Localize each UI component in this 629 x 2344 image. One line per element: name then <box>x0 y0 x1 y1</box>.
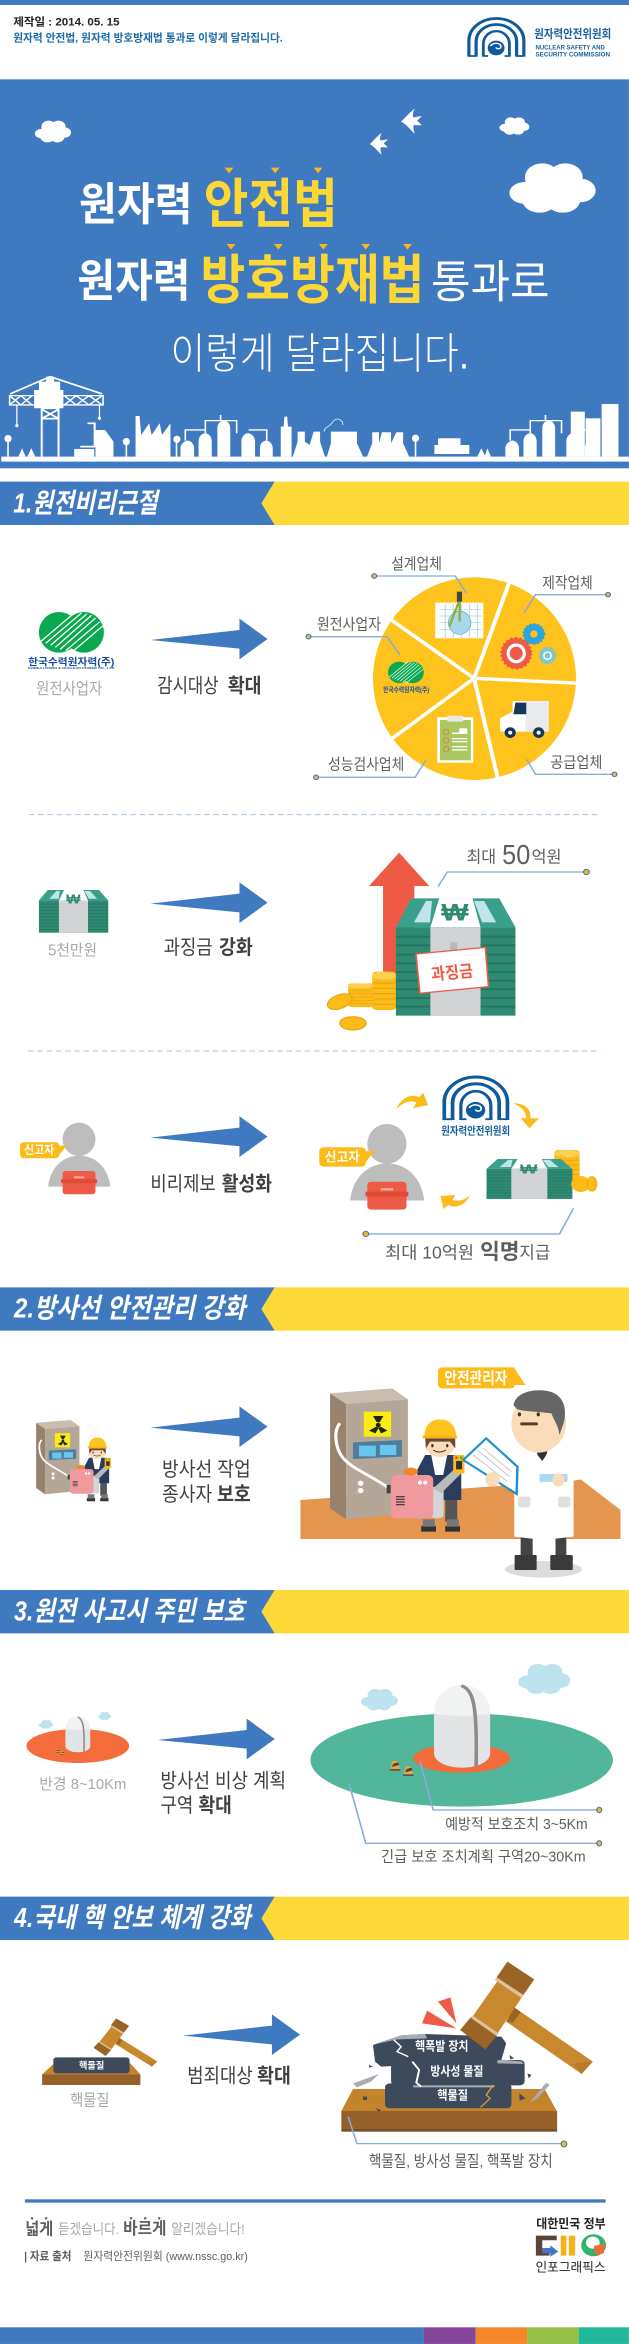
title line 2: 원자력 <box>77 256 191 307</box>
icon: big gavel smashing blocks <box>341 1962 593 2132</box>
callout: anonymous reward: 최대 10억원 <box>385 1243 474 1263</box>
title line 2: 통과로 <box>431 257 550 308</box>
section 1 header bar <box>0 482 629 525</box>
text: wider crime scope: 확대 <box>257 2065 291 2087</box>
text: emergency plan: 구역 <box>160 1794 193 1816</box>
icon: red up arrow <box>369 853 429 977</box>
section 2 header bar <box>0 1287 629 1331</box>
logo: government infographics: 인포그래픽스 <box>535 2260 606 2274</box>
callouts: pie labels: 설계업체 <box>391 555 442 573</box>
icon: clipboard <box>437 716 473 763</box>
callout: anonymous reward: 익명 <box>480 1240 519 1264</box>
panel: penalties and whistleblowing <box>20 815 600 1264</box>
icon: money and coins: ₩ <box>520 1162 538 1177</box>
icon: big money stack with tag <box>396 898 515 1016</box>
logo: KHNP before: KOREA HYDRO & NUCLEAR POWER CO., LTD <box>28 666 115 670</box>
arrow <box>183 2014 300 2055</box>
callout: max 5 billion won: 억원 <box>531 847 562 866</box>
arrow <box>150 619 268 659</box>
arrow <box>150 1406 268 1447</box>
icon: big whistleblower <box>319 1124 424 1210</box>
arrow <box>150 1116 268 1157</box>
footer source <box>24 2250 248 2263</box>
label: 50 million won: 5천만원 <box>48 942 97 959</box>
section 4 header bar: 4.국내 핵 안보 체계 강화 <box>13 1903 253 1933</box>
text: worker protection: 보호 <box>217 1483 251 1505</box>
footer slogan: 넓게 <box>25 2219 53 2238</box>
logo: government infographics <box>535 2216 606 2274</box>
small zone map <box>26 1712 129 1763</box>
pie chart <box>373 577 580 780</box>
icon: big gavel smashing blocks: 방사성 물질 <box>430 2064 483 2078</box>
title line 1: 안전법 <box>204 174 338 234</box>
callouts: zone sizes: 예방적 보호조치 3~5Km <box>445 1816 588 1833</box>
text: emergency plan: 방사선 비상 계획 <box>160 1769 286 1792</box>
small KHNP logo in pie: 한국수력원자력(주) <box>383 686 430 694</box>
logo: commission <box>441 1077 510 1137</box>
callouts: pie labels: 원전사업자 <box>317 616 381 633</box>
hero banner <box>0 79 629 468</box>
title line 1 <box>79 168 338 234</box>
callout: max 5 billion won: 50 <box>502 840 530 870</box>
text: whistleblowing: 비리제보 <box>150 1173 216 1195</box>
callout: anonymous reward: 지급 <box>519 1243 550 1263</box>
icon: big gavel smashing blocks: 핵물질 <box>437 2088 468 2102</box>
icon: truck <box>500 701 549 738</box>
icon: small gavel and block: 핵물질 <box>79 2059 104 2071</box>
callouts: pie labels: 공급업체 <box>550 754 602 771</box>
title line 2: 방호방재법 <box>201 251 424 310</box>
text: emergency plan <box>160 1769 286 1816</box>
logo: nuclear safety commission: NUCLEAR SAFETY AND <box>535 43 605 51</box>
page header <box>0 0 629 58</box>
section 3 header bar <box>0 1590 629 1633</box>
clouds <box>35 117 596 213</box>
icon: big money stack with tag: ₩ <box>441 899 470 926</box>
footer slogan: 듣겠습니다. <box>58 2221 119 2238</box>
icon: big cabinet and worker <box>330 1388 464 1532</box>
logo: KHNP before: 한국수력원자력(주) <box>28 655 115 668</box>
footer source: | 자료 출처 <box>24 2250 71 2263</box>
callout: anonymous reward <box>363 1208 574 1264</box>
subtitle line: 원자력 안전법, 원자력 방호방재법 통과로 이렇게 달라집니다. <box>13 31 283 44</box>
icon: safety manager <box>463 1390 582 1578</box>
icon: cycle arrows <box>396 1093 539 1209</box>
logo: nuclear safety commission: SECURITY COMMISSION <box>535 50 610 58</box>
section 2 header bar: 2.방사선 안전관리 강화 <box>13 1294 248 1324</box>
panel: nuclear security <box>24 1962 606 2274</box>
production date: 제작일 : 2014. 05. 15 <box>13 14 120 28</box>
large zone map <box>310 1664 613 1807</box>
text: emergency plan: 확대 <box>199 1794 232 1816</box>
title line 1: 원자력 <box>79 179 193 230</box>
panel: radiation safety <box>36 1367 621 1578</box>
logo: commission: 원자력안전위원회 <box>441 1125 510 1137</box>
callout: covered materials <box>348 2117 567 2170</box>
footer slogan: 알리겠습니다! <box>171 2221 245 2238</box>
logo: nuclear safety commission <box>469 19 611 58</box>
callout: max 5 billion won <box>438 840 589 887</box>
icon: small whistleblower: 신고자 <box>24 1143 54 1157</box>
callouts: zone sizes: 긴급 보호 조치계획 구역20~30Km <box>381 1849 586 1865</box>
icon: small money stack <box>39 890 108 933</box>
tag: safety manager: 안전관리자 <box>444 1369 507 1387</box>
arrow <box>150 882 268 923</box>
label: nuclear material: 핵물질 <box>70 2091 110 2109</box>
small KHNP logo in pie <box>383 662 430 694</box>
icon: small money stack: ₩ <box>66 892 81 906</box>
arrow <box>158 1719 275 1759</box>
icon: blueprint <box>435 592 483 638</box>
text: wider inspection: 확대 <box>228 675 262 697</box>
text: whistleblowing: 활성화 <box>222 1173 272 1195</box>
icon: small gavel and block <box>42 2018 157 2085</box>
icon: big whistleblower: 신고자 <box>325 1150 360 1165</box>
icon: small cabinet and worker <box>36 1420 111 1501</box>
icon: big gavel smashing blocks: 핵폭발 장치 <box>415 2039 468 2053</box>
label: operator: 원전사업자 <box>36 680 102 698</box>
city skyline <box>1 377 629 462</box>
title line 2 <box>77 244 550 310</box>
title line 3: 이렇게 달라집니다. <box>170 330 469 378</box>
text: worker protection: 종사자 <box>162 1483 212 1505</box>
text: wider crime scope: 범죄대상 <box>187 2065 253 2087</box>
section 3 header bar: 3.원전 사고시 주민 보호 <box>14 1597 247 1627</box>
panel: inspection scope <box>28 555 617 780</box>
footer colour bar <box>0 2327 629 2344</box>
icon: gears <box>501 624 556 669</box>
callouts: pie labels <box>306 555 617 780</box>
logo: government infographics: 대한민국 정부 <box>536 2216 606 2231</box>
text: stronger penalty: 과징금 <box>164 936 213 959</box>
icon: coins <box>324 972 396 1030</box>
text: wider inspection: 감시대상 <box>157 675 219 697</box>
text: worker protection: 방사선 작업 <box>162 1458 251 1480</box>
callouts: zone sizes <box>349 1761 602 1865</box>
callout: covered materials: 핵물질, 방사성 물질, 핵폭발 장치 <box>369 2152 553 2170</box>
birds <box>370 108 422 155</box>
text: worker protection <box>162 1458 251 1505</box>
logo: KHNP before <box>28 612 115 670</box>
section 4 header bar <box>0 1897 629 1940</box>
ground <box>300 1479 621 1539</box>
callout: max 5 billion won: 최대 <box>466 847 496 866</box>
section 1 header bar: 1.원전비리근절 <box>13 489 160 519</box>
callouts: pie labels: 성능검사업체 <box>328 756 404 773</box>
footer slogan <box>25 2217 245 2238</box>
footer source: 원자력안전위원회 (www.nssc.go.kr) <box>83 2250 248 2263</box>
icon: big money stack with tag: 과징금 <box>430 961 474 984</box>
panel: emergency zones <box>26 1664 613 1865</box>
text: stronger penalty: 강화 <box>219 936 253 959</box>
label: radius: 반경 8~10Km <box>39 1776 126 1793</box>
footer slogan: 바르게 <box>123 2219 166 2238</box>
icon: money and coins <box>487 1150 597 1199</box>
icon: small whistleblower <box>20 1123 110 1194</box>
callouts: pie labels: 제작업체 <box>542 574 593 592</box>
